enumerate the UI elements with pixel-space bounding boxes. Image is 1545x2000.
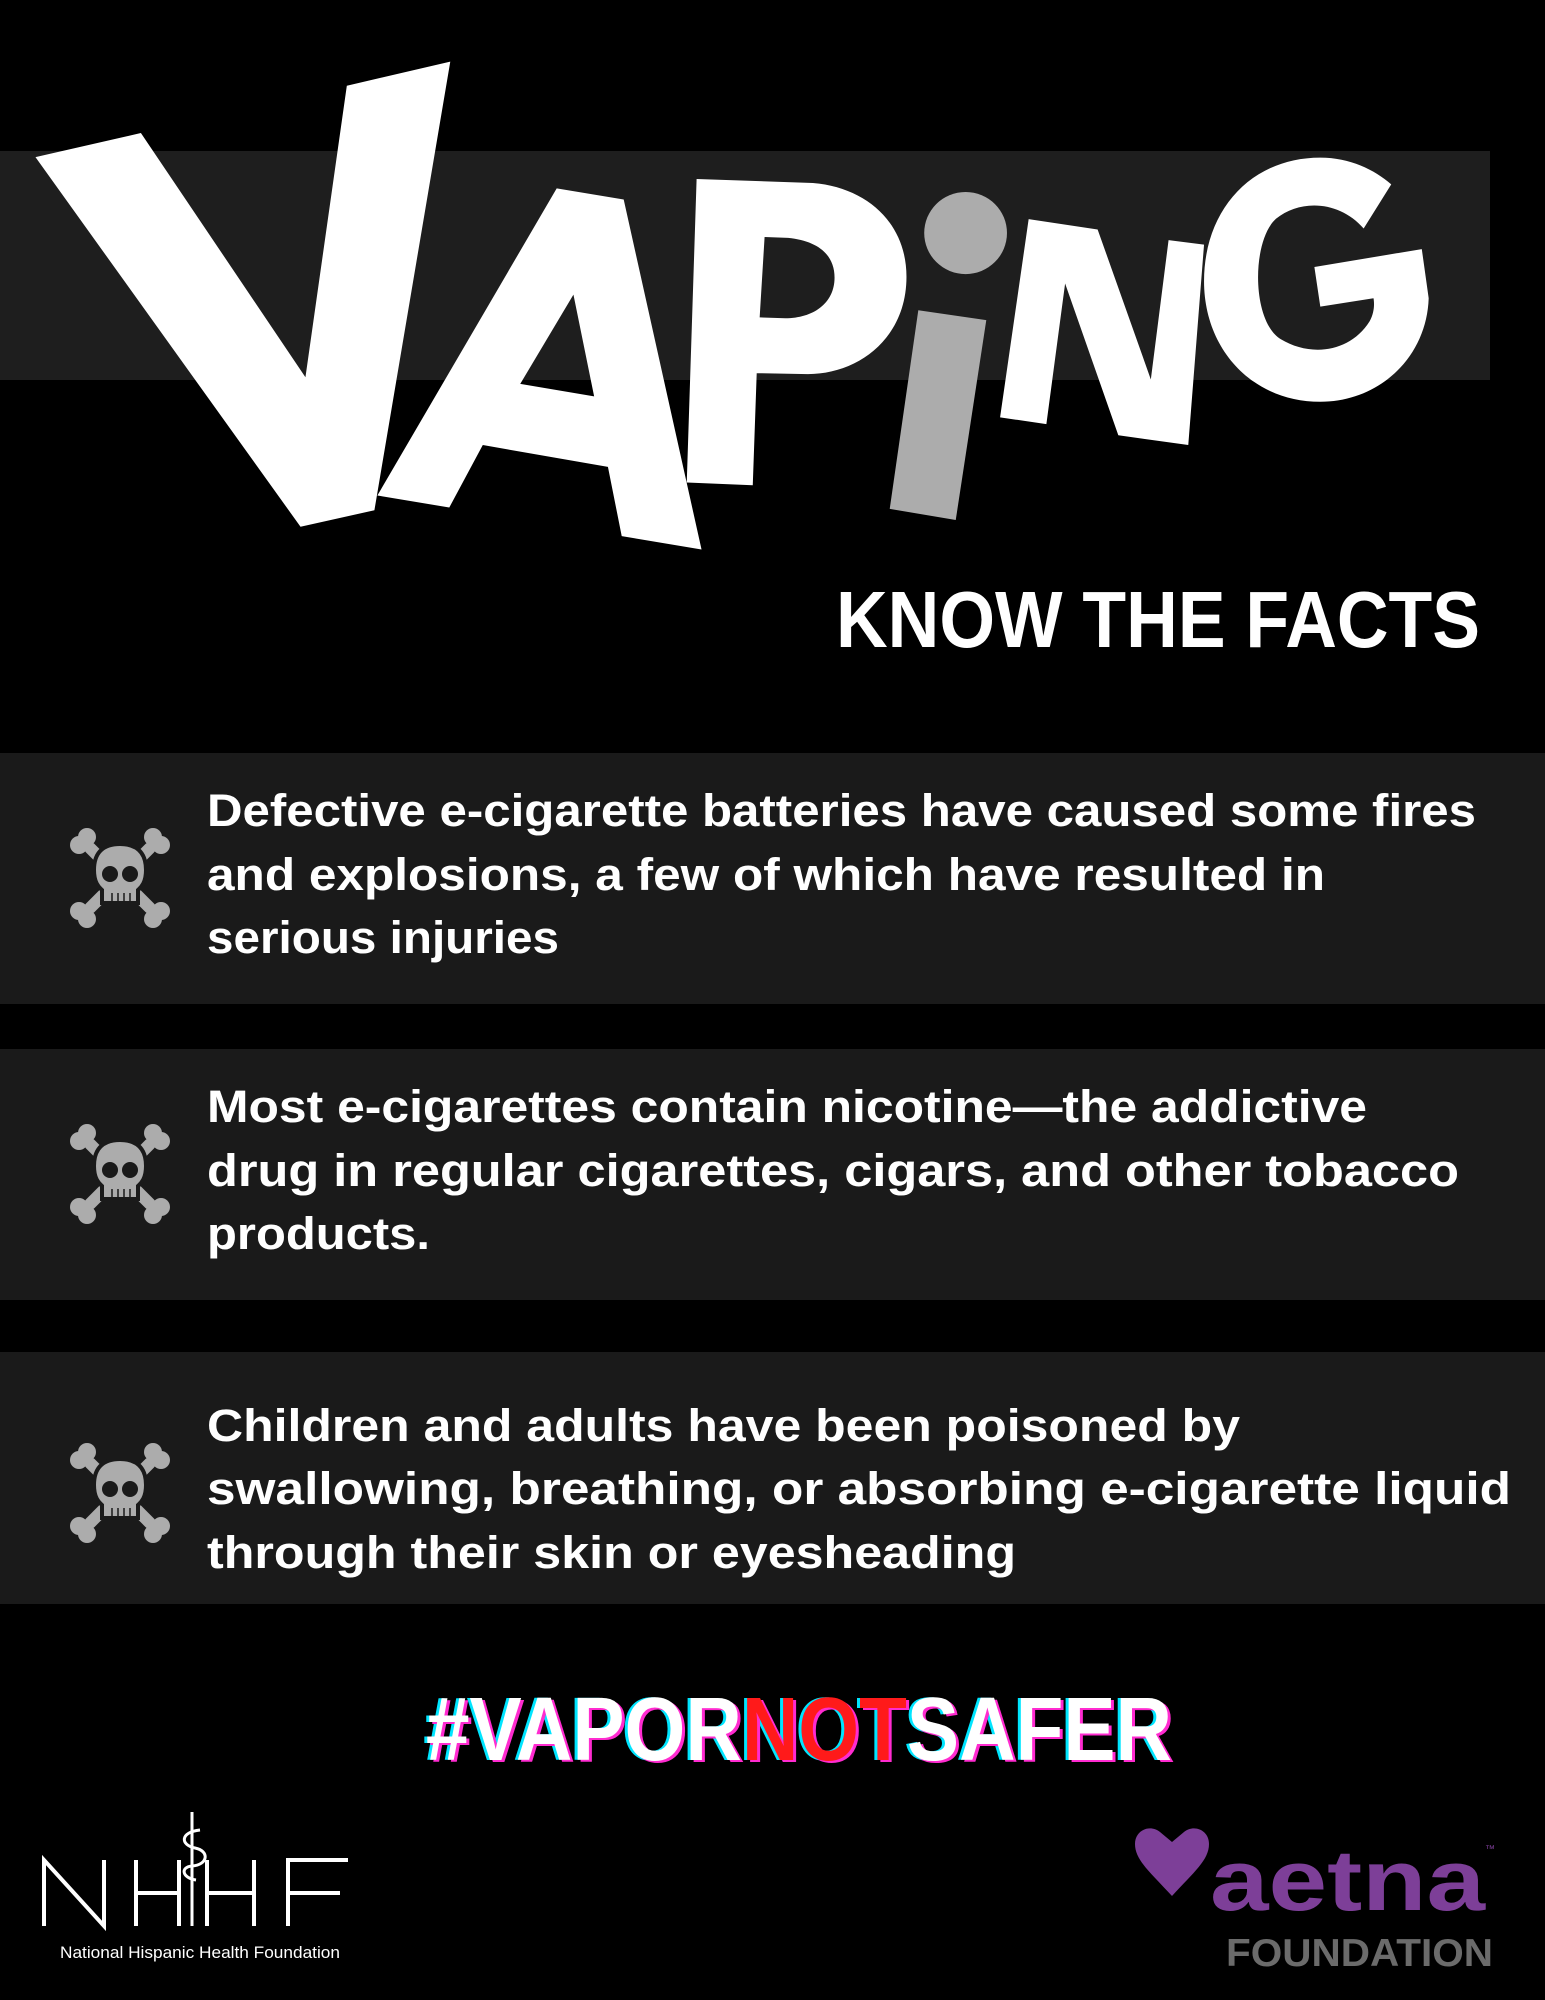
logo: NHHF: [44, 1812, 348, 1962]
fact 3 text: swallowing, breathing, or absorbing e-cigarette liquid: [207, 1463, 1511, 1514]
fact 1 text: [207, 785, 1476, 963]
logo: aetna foundation: ™: [1485, 1844, 1495, 1855]
fact 3 text: Children and adults have been poisoned by: [207, 1400, 1240, 1451]
logo: aetna foundation: aetna: [1210, 1833, 1486, 1929]
fact 2 text: Most e-cigarettes contain nicotine—the addictive: [207, 1081, 1367, 1132]
letter i: [890, 192, 1007, 520]
fact 3 text: through their skin or eyesheading: [207, 1527, 1016, 1578]
logo: aetna foundation: FOUNDATION: [1226, 1932, 1493, 1975]
icon: skull: [70, 1124, 170, 1224]
panel: fact 1: [0, 753, 1545, 1004]
title band background: [0, 151, 1490, 380]
fact 2 text: drug in regular cigarettes, cigars, and other tobacco: [207, 1145, 1459, 1196]
panel: fact 3: [0, 1352, 1545, 1604]
icon: skull: [70, 828, 170, 928]
title: VAPING: [35, 62, 1429, 550]
hashtag: #VAPORNOTSAFER: [429, 1682, 1175, 1782]
fact 1 text: and explosions, a few of which have resulted in: [207, 849, 1325, 900]
subtitle: KNOW THE FACTS: [836, 575, 1480, 664]
fact 2 text: products.: [207, 1208, 430, 1259]
letter G: [1204, 158, 1429, 402]
fact 3 text: [207, 1400, 1511, 1578]
panel: fact 2: [0, 1049, 1545, 1300]
letter A: [377, 188, 702, 550]
fact 1 text: Defective e-cigarette batteries have caused some fires: [207, 785, 1476, 836]
logo: aetna foundation: [1135, 1828, 1495, 1975]
fact 1 text: serious injuries: [207, 912, 559, 963]
hashtag: #VAPORNOTSAFER: [423, 1680, 1169, 1780]
letter P: [687, 179, 906, 485]
hashtag: #VAPORNOTSAFER: [426, 1680, 1172, 1780]
letter N: [1000, 219, 1204, 445]
logo: NHHF: National Hispanic Health Foundation: [60, 1943, 340, 1962]
letter V: [35, 62, 450, 527]
icon: skull: [70, 1443, 170, 1543]
fact 2 text: [207, 1081, 1459, 1259]
